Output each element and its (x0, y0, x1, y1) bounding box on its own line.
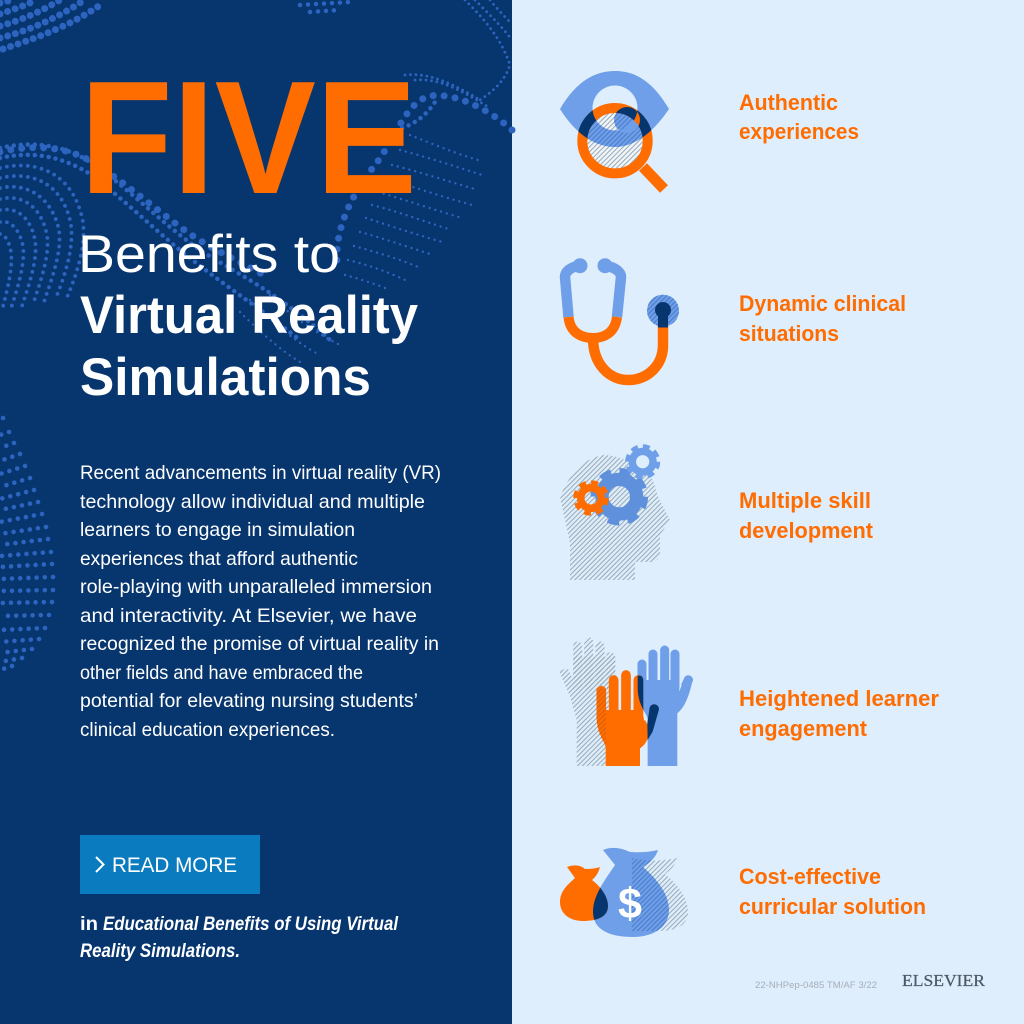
label: Multiple skill development: development (739, 518, 873, 543)
label: Cost-effective curricular solution: curricular solution (739, 894, 926, 919)
text block: introduction paragraph: and interactivity. At Elsevier, we have (80, 605, 417, 627)
text block: article reference: Reality Simulations. (80, 941, 240, 962)
label: Cost-effective curricular solution (739, 864, 926, 919)
panel: left navy background (0, 0, 512, 1024)
text block: introduction paragraph: Recent advancements in virtual reality (VR) (80, 462, 441, 484)
icon: money bags (560, 848, 688, 937)
logo: Elsevier wordmark: ELSEVIER (902, 971, 985, 990)
icon: money bags: $ (618, 880, 642, 928)
text block: introduction paragraph (80, 462, 441, 741)
button: read more (80, 835, 260, 894)
text block: article reference: Educational Benefits of Using Virtual (103, 914, 399, 935)
label: Dynamic clinical situations: situations (739, 321, 839, 346)
background: dotted wave pattern (0, 0, 512, 670)
icon: raised hands (559, 642, 693, 766)
label: Heightened learner engagement: engagement (739, 716, 867, 741)
footer: job code: 22-NHPep-0485 TM/AF 3/22 (755, 980, 877, 991)
label: Heightened learner engagement: Heightened learner (739, 686, 939, 711)
text block: introduction paragraph: experiences that afford authentic (80, 548, 358, 570)
button: read more: READ MORE (112, 854, 237, 877)
label: Multiple skill development (739, 488, 873, 543)
icon: head with gears (560, 444, 670, 580)
label: Authentic experiences: Authentic (739, 90, 838, 115)
label: Authentic experiences: experiences (739, 119, 859, 144)
heading: Benefits to Virtual Reality Simulations: Benefits to (78, 225, 340, 284)
label: Heightened learner engagement (739, 686, 939, 741)
text block: article reference: in (80, 914, 98, 935)
text block: introduction paragraph: recognized the promise of virtual reality in (80, 633, 439, 655)
text block: introduction paragraph: role-playing with unparalleled immersion (80, 576, 432, 598)
title: FIVE: FIVE (80, 48, 417, 228)
text block: introduction paragraph: technology allow individual and multiple (80, 491, 425, 513)
text block: introduction paragraph: other fields and have embraced the (80, 662, 363, 684)
label: Dynamic clinical situations (739, 291, 906, 346)
label: Cost-effective curricular solution: Cost-effective (739, 864, 881, 889)
heading: Benefits to Virtual Reality Simulations: Virtual Reality (80, 286, 418, 345)
panel: right light blue background (512, 0, 1024, 1024)
heading: Benefits to Virtual Reality Simulations: Simulations (80, 348, 371, 407)
icon: stethoscope (565, 258, 679, 380)
text block: introduction paragraph: learners to engage in simulation (80, 519, 355, 541)
icon: eye and magnifying glass (560, 71, 669, 189)
text block: introduction paragraph: clinical education experiences. (80, 719, 335, 741)
text block: article reference (80, 914, 399, 962)
label: Multiple skill development: Multiple skill (739, 488, 871, 513)
heading: Benefits to Virtual Reality Simulations (78, 225, 418, 407)
text block: introduction paragraph: potential for elevating nursing students’ (80, 690, 418, 712)
label: Authentic experiences (739, 90, 859, 144)
label: Dynamic clinical situations: Dynamic clinical (739, 291, 906, 316)
